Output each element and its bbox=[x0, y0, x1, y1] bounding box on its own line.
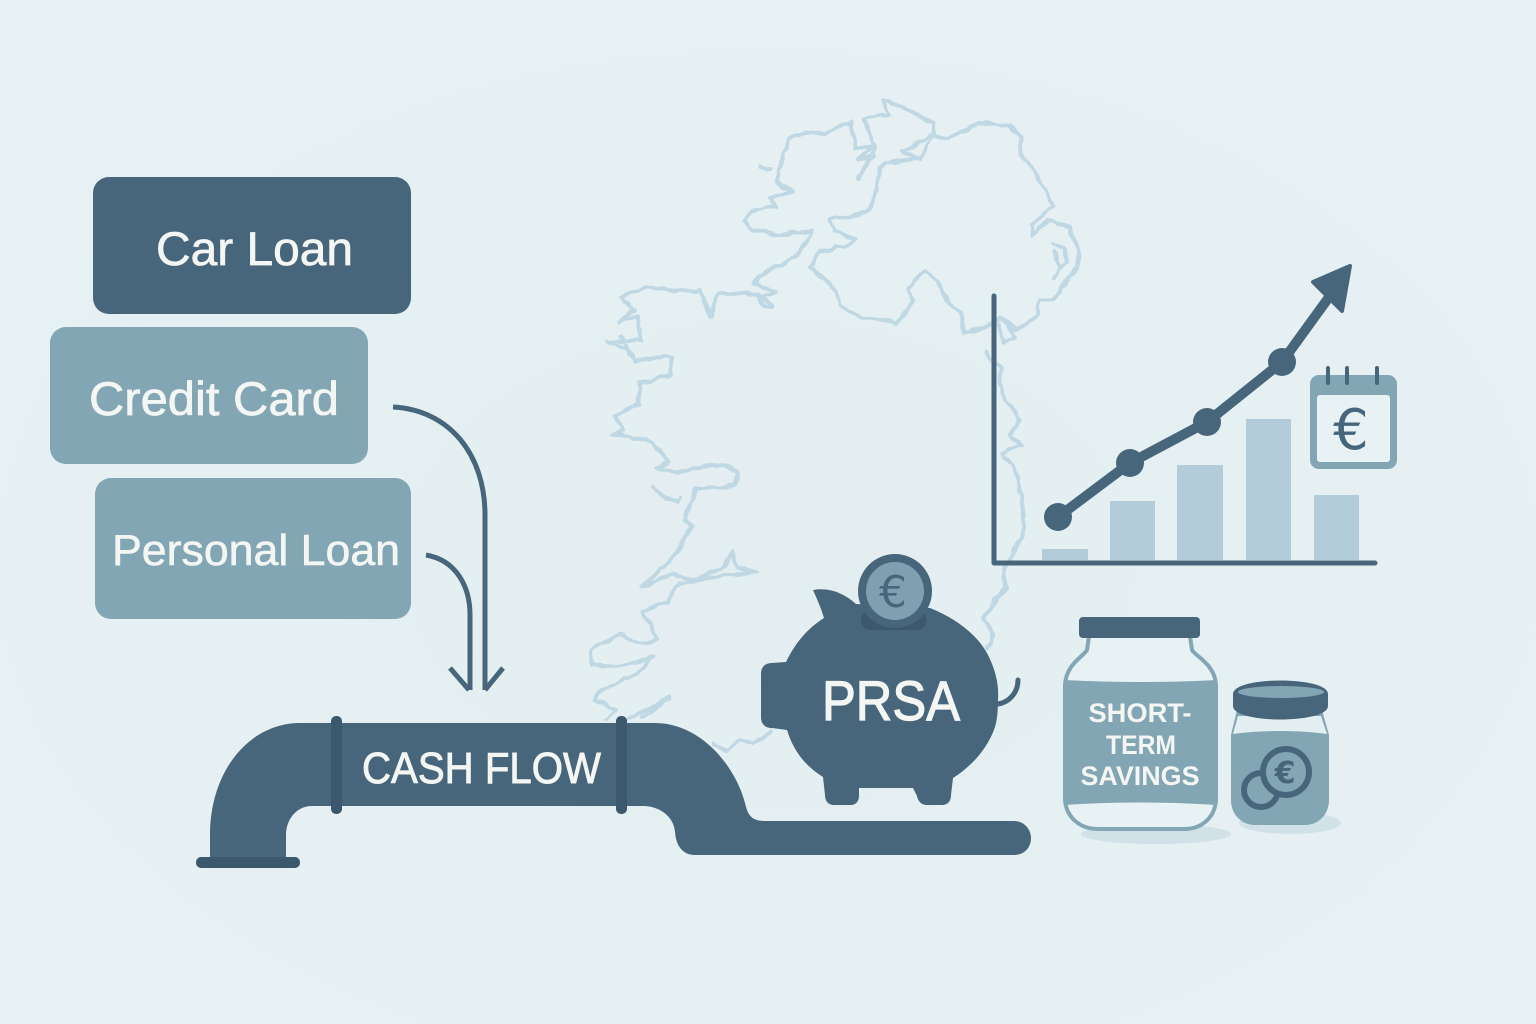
panel: personal loan box bbox=[95, 478, 411, 619]
panel: credit card box bbox=[50, 327, 368, 464]
bar chart bbox=[994, 266, 1375, 563]
icon: piggy bank PRSA: PRSA bbox=[822, 669, 961, 732]
coin with euro bbox=[858, 554, 932, 628]
coin with euro: € bbox=[879, 567, 907, 618]
icon: short-term savings jar: SAVINGS bbox=[1080, 761, 1200, 791]
icon: piggy bank PRSA bbox=[761, 554, 1018, 805]
icon: short-term savings jar: SHORT- bbox=[1088, 698, 1192, 728]
icon: calendar with euro: € bbox=[1333, 398, 1369, 463]
small coin bbox=[1244, 773, 1278, 807]
large coin with euro bbox=[1263, 749, 1309, 795]
arrow: credit card to cash flow bbox=[393, 407, 503, 690]
icon: calendar with euro bbox=[1310, 368, 1397, 469]
panel: car loan box bbox=[93, 177, 411, 314]
icon: small coin jar bbox=[1231, 680, 1341, 834]
icon: short-term savings jar: TERM bbox=[1106, 730, 1176, 760]
panel: credit card box: Credit Card bbox=[89, 372, 339, 425]
map of Ireland outline bbox=[592, 100, 1078, 752]
coin slot bbox=[861, 610, 926, 630]
panel: personal loan box: Personal Loan bbox=[112, 526, 400, 575]
pipe: cash flow bbox=[196, 716, 1031, 868]
arrow: personal loan to cash flow bbox=[426, 555, 470, 690]
pipe: cash flow: CASH FLOW bbox=[362, 744, 601, 793]
growth arrow line bbox=[1044, 266, 1350, 531]
panel: car loan box: Car Loan bbox=[156, 222, 353, 275]
icon: short-term savings jar bbox=[1064, 617, 1231, 844]
large coin with euro: € bbox=[1274, 756, 1295, 791]
chart axes bbox=[994, 296, 1375, 563]
